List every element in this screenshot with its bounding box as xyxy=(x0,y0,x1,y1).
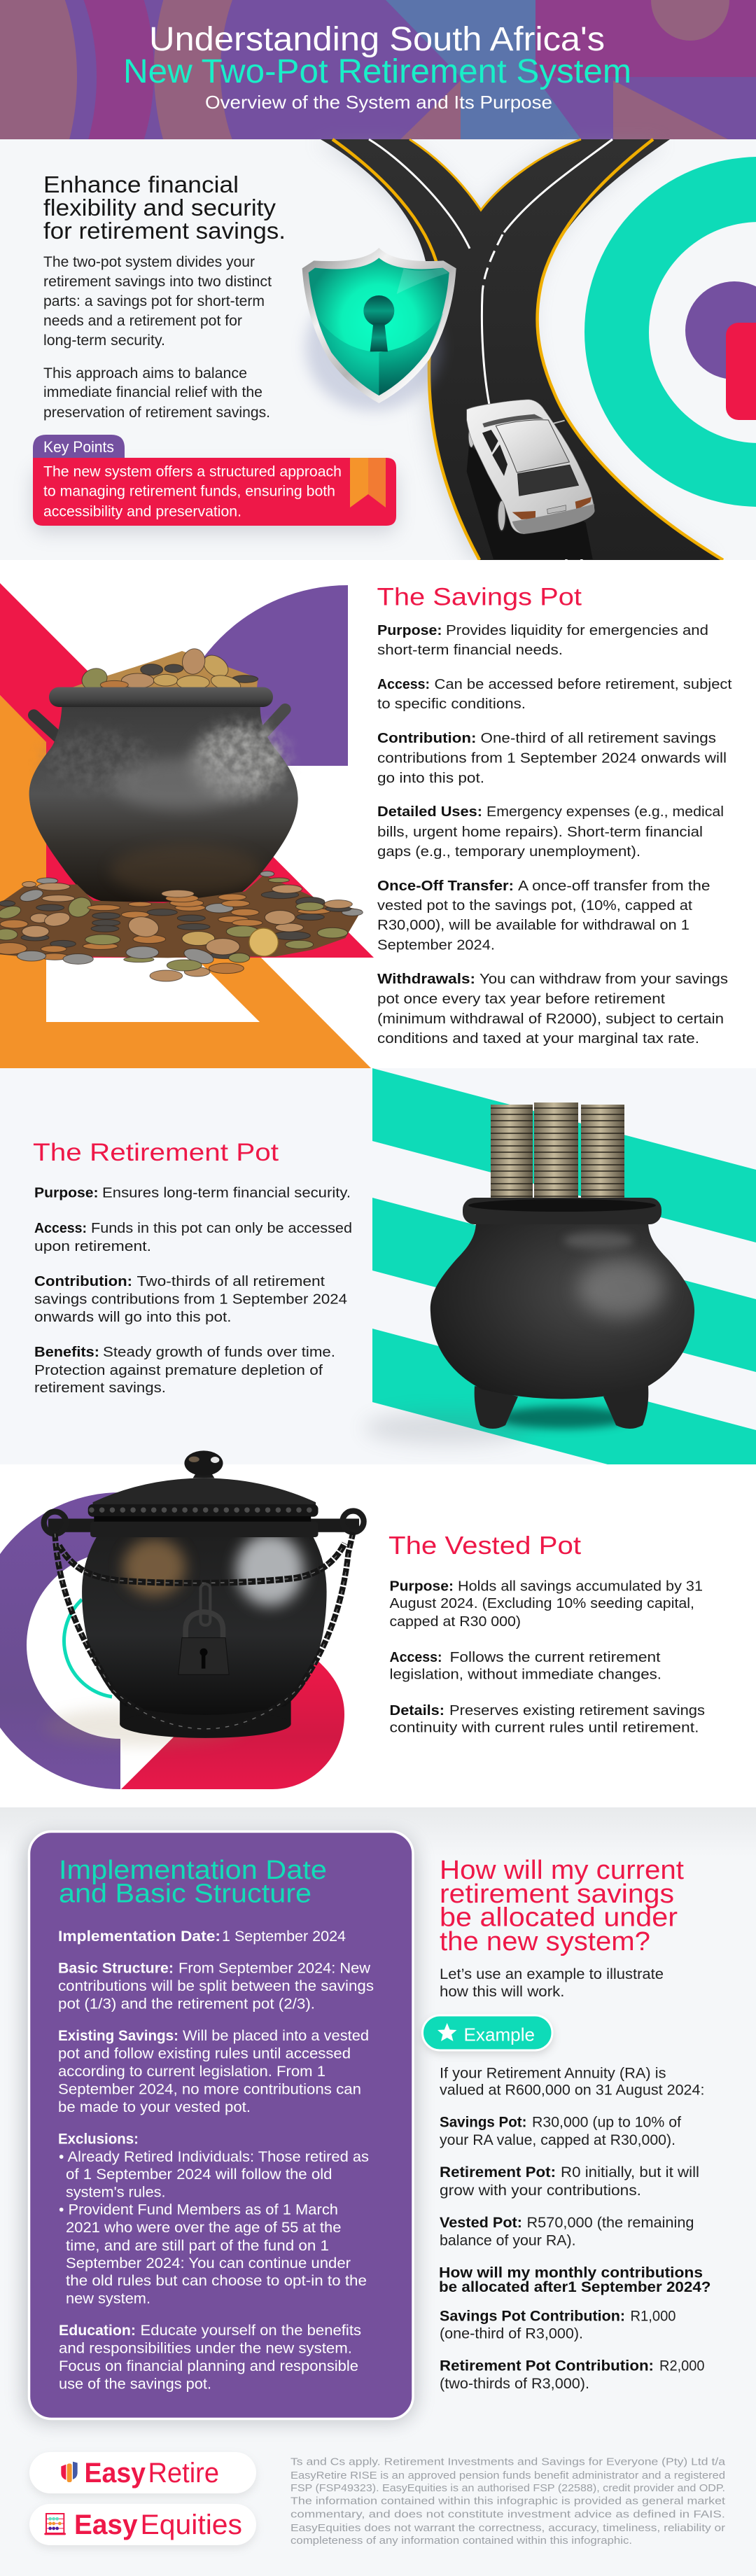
text: savings pot details: gaps (e.g., temporary unemployment). xyxy=(377,844,640,860)
text: implementation details: new system. xyxy=(66,2290,150,2307)
text: savings pot details: Can be accessed before retirement, subject xyxy=(434,677,732,692)
knob xyxy=(184,1450,223,1478)
coin stacks xyxy=(491,1102,624,1206)
text: two-pot description: This approach aims to balance xyxy=(43,365,247,382)
text: vested pot details: legislation, without immediate changes. xyxy=(389,1667,662,1683)
text: implementation details: Existing Savings: xyxy=(58,2028,178,2044)
heading: enhance financial flexibility: for retirement savings. xyxy=(43,218,286,244)
text: implementation details: be made to your vested pot. xyxy=(58,2099,251,2115)
text: two-pot description: parts: a savings pot for short-term xyxy=(43,293,265,309)
heading: the vested pot: The Vested Pot xyxy=(388,1531,581,1560)
panel: the vested pot xyxy=(0,1450,756,1807)
text: implementation details: Exclusions: xyxy=(58,2131,139,2148)
text: retirement pot details: Protection against premature depletion of xyxy=(34,1363,323,1378)
text: legal disclaimer: commentary, and does not constitute investment advice as defined in FAIS. xyxy=(290,2509,725,2520)
text: savings pot details: bills, urgent home repairs). Short-term financial xyxy=(377,825,703,840)
text: vested pot details: Preserves existing retirement savings xyxy=(449,1703,705,1718)
illustration: pot of coins xyxy=(0,646,363,981)
callout: key points xyxy=(33,435,396,532)
text: implementation details: September 2024, no more contributions can xyxy=(58,2082,361,2097)
heading: the savings pot: The Savings Pot xyxy=(377,584,582,610)
text: savings pot details: conditions and taxed at your marginal tax rate. xyxy=(377,1031,699,1046)
text: savings pot details: Detailed Uses: xyxy=(377,804,482,820)
heading: enhance financial flexibility: flexibility and security xyxy=(43,195,276,220)
text: savings pot details: (minimum withdrawal of R2000), subject to certain xyxy=(377,1011,724,1027)
text: savings pot details: go into this pot. xyxy=(377,771,484,786)
heading: how will my current retirement savings be allocated: retirement savings xyxy=(440,1879,674,1909)
logo: EasyEquities: Equities xyxy=(140,2510,242,2540)
text: example calculation: Savings Pot: xyxy=(440,2114,526,2131)
icon: shield with keyhole xyxy=(302,248,456,411)
text: savings pot details: Emergency expenses (e.g., medical xyxy=(486,804,724,820)
text: vested pot details: capped at R30 000) xyxy=(389,1614,521,1630)
text: savings pot details: contributions from 1 September 2024 onwards will xyxy=(377,750,727,766)
text: implementation details: • xyxy=(59,2202,64,2218)
text: implementation details: Provident Fund Members as of 1 March xyxy=(69,2202,338,2218)
heading: how will my current retirement savings be allocated: be allocated under xyxy=(440,1903,678,1932)
panel: implementation and example xyxy=(0,1807,756,2549)
text: two-pot description: The two-pot system divides your xyxy=(43,254,255,270)
text: implementation details: 1 September 2024 xyxy=(222,1928,346,1945)
text: retirement pot details: Funds in this pot can only be accessed xyxy=(91,1221,352,1236)
text: savings pot details: Provides liquidity for emergencies and xyxy=(446,623,708,638)
icon: star xyxy=(438,2023,456,2041)
badge: example: Example xyxy=(463,2024,535,2045)
text: example calculation: R2,000 xyxy=(659,2358,704,2374)
text: retirement pot details: Access: xyxy=(34,1221,87,1236)
panel: header banner xyxy=(0,0,756,139)
illustration: car xyxy=(467,400,594,559)
text: example calculation: R570,000 (the remaining xyxy=(526,2215,694,2231)
title line 2: New Two-Pot Retirement System xyxy=(123,53,631,90)
text: example intro xyxy=(440,1966,664,2000)
text: example calculation: R1,000 xyxy=(630,2309,676,2324)
text: retirement pot details: Ensures long-term financial security. xyxy=(102,1186,351,1201)
keyhole xyxy=(363,295,394,351)
text: two-pot description: preservation of retirement savings. xyxy=(43,405,270,421)
callout: key points: Key Points xyxy=(43,438,114,456)
panel: the savings pot xyxy=(0,560,756,1069)
text: example intro: Let’s use an example to illustrate xyxy=(440,1966,664,1982)
heading: enhance financial flexibility xyxy=(43,172,286,244)
background teal stripes xyxy=(372,1068,756,1464)
text: legal disclaimer: EasyRetire RISE is an approved pension funds benefit administrator and a registered xyxy=(290,2470,725,2482)
text: example calculation: Savings Pot Contribution: xyxy=(440,2309,625,2324)
text: example calculation: be allocated after1 September 2024? xyxy=(439,2279,711,2295)
heading: implementation date xyxy=(59,1856,327,1908)
text: implementation details: Basic Structure: xyxy=(58,1960,174,1977)
text: implementation details: according to current legislation. From 1 xyxy=(58,2064,326,2080)
text: legal disclaimer xyxy=(290,2456,726,2547)
logo: EasyEquities xyxy=(29,2504,256,2549)
text: two-pot description: immediate financial relief with the xyxy=(43,384,262,400)
logo: EasyRetire: Retire xyxy=(148,2458,219,2488)
text: implementation details: Education: xyxy=(59,2323,136,2339)
text: savings pot details: Purpose: xyxy=(377,623,442,638)
heading: the retirement pot: The Retirement Pot xyxy=(33,1139,279,1166)
text: two-pot description: needs and a retirement pot for xyxy=(43,313,242,329)
text: implementation details xyxy=(58,1928,374,2393)
text: implementation details: Already Retired Individuals: Those retired as xyxy=(67,2149,369,2165)
text: implementation details: Focus on financial planning and responsible xyxy=(59,2358,358,2374)
text: example calculation: (one-third of R3,000). xyxy=(440,2325,583,2342)
text: savings pot details: Access: xyxy=(377,677,430,692)
text: savings pot details: Withdrawals: xyxy=(377,972,475,987)
text: retirement pot details xyxy=(34,1186,352,1396)
text: implementation details: use of the savings pot. xyxy=(59,2376,211,2393)
text: legal disclaimer: EasyEquities does not warrant the correctness, accuracy, timeliness, reliability or xyxy=(290,2522,725,2534)
text: implementation details: • xyxy=(59,2149,64,2165)
text: retirement pot details: Contribution: xyxy=(34,1274,132,1289)
text: retirement pot details: Steady growth of funds over time. xyxy=(103,1345,335,1360)
text: example calculation: balance of your RA). xyxy=(440,2233,575,2248)
heading: enhance financial flexibility: Enhance financial xyxy=(43,172,239,197)
subtitle: Overview of the System and Its Purpose xyxy=(205,92,552,113)
title line 1: Understanding South Africa's xyxy=(149,21,605,58)
text: implementation details: From September 2024: New xyxy=(178,1960,371,1977)
text: two-pot description: long-term security. xyxy=(43,332,165,349)
text: retirement pot details: onwards will go into this pot. xyxy=(34,1310,231,1325)
heading: implementation date: and Basic Structure xyxy=(59,1879,312,1908)
card: implementation date and basic structure xyxy=(24,1831,416,2422)
text: retirement pot details: savings contributions from 1 September 2024 xyxy=(34,1292,347,1308)
text: implementation details: Will be placed into a vested xyxy=(183,2028,369,2044)
text: savings pot details: A once-off transfer from the xyxy=(518,878,710,894)
text: savings pot details: short-term financial needs. xyxy=(377,643,563,658)
callout: key points: accessibility and preservation. xyxy=(43,504,241,519)
text: savings pot details: vested pot to the savings pot, (10%, capped at xyxy=(377,898,692,913)
badge: example xyxy=(423,2015,553,2054)
text: implementation details: of 1 September 2024 will follow the old xyxy=(66,2166,332,2183)
text: savings pot details: Once-Off Transfer: xyxy=(377,878,514,894)
text: implementation details: and responsibilities under the new system. xyxy=(59,2341,352,2356)
text: savings pot details: September 2024. xyxy=(377,938,495,953)
text: example calculation: If your Retirement Annuity (RA) is xyxy=(440,2065,666,2082)
text: vested pot details: Follows the current retirement xyxy=(449,1650,661,1665)
text: vested pot details: Details: xyxy=(389,1703,444,1718)
background ring shapes xyxy=(0,1492,344,1789)
text: retirement pot details: Two-thirds of all retirement xyxy=(137,1274,325,1289)
illustration: teal target rings xyxy=(584,157,756,507)
logo: EasyRetire: Easy xyxy=(84,2458,146,2488)
text: vested pot details: continuity with current rules until retirement. xyxy=(389,1721,699,1736)
heading: how will my current retirement savings be allocated: How will my current xyxy=(440,1856,684,1885)
icon: padlock xyxy=(178,1584,229,1674)
text: savings pot details: to specific conditions. xyxy=(377,696,526,712)
text: implementation details: time, and are still part of the fund on 1 xyxy=(66,2238,329,2254)
text: vested pot details xyxy=(389,1579,705,1736)
text: legal disclaimer: The information contained within this infographic is provided as general market xyxy=(290,2495,726,2507)
background geometric shapes xyxy=(0,583,374,1069)
text: savings pot details: R30,000), will be available for withdrawal on 1 xyxy=(377,918,690,933)
text: implementation details: 2021 who were over the age of 55 at the xyxy=(66,2220,342,2236)
text: vested pot details: Access: xyxy=(389,1650,442,1665)
coins around the pot xyxy=(0,871,363,981)
text: savings pot details: You can withdraw from your savings xyxy=(479,972,728,987)
text: example calculation: R30,000 (up to 10% of xyxy=(532,2114,681,2131)
text: example calculation: valued at R600,000 on 31 August 2024: xyxy=(440,2082,704,2099)
text: implementation details: system's rules. xyxy=(66,2184,165,2201)
text: implementation details: contributions will be split between the savings xyxy=(58,1978,374,1994)
text: retirement pot details: Purpose: xyxy=(34,1186,98,1201)
heading: implementation date: Implementation Date xyxy=(59,1856,327,1885)
text: implementation details: Educate yourself on the benefits xyxy=(140,2323,361,2339)
text: example calculation: your RA value, capped at R30,000). xyxy=(440,2132,676,2148)
text: savings pot details: Contribution: xyxy=(377,731,476,746)
icon: EasyRetire bars xyxy=(61,2462,78,2482)
callout: key points: The new system offers a structured approach xyxy=(43,463,342,480)
text: example calculation: (two-thirds of R3,000). xyxy=(440,2376,589,2392)
text: savings pot details xyxy=(377,623,732,1046)
coins on top of the pot xyxy=(79,646,258,694)
text: vested pot details: Purpose: xyxy=(389,1579,454,1595)
text: example calculation: grow with your contributions. xyxy=(440,2183,641,2199)
panel: introduction xyxy=(33,139,756,563)
text: vested pot details: August 2024. (Excluding 10% seeding capital, xyxy=(389,1596,694,1611)
text: savings pot details: pot once every tax year before retirement xyxy=(377,991,665,1007)
logo: EasyRetire xyxy=(29,2452,256,2497)
text: implementation details: the old rules but can choose to opt-in to the xyxy=(66,2273,367,2289)
text: legal disclaimer: Ts and Cs apply. Retirement Investments and Savings for Everyone (Pty) Ltd t/a xyxy=(290,2456,726,2468)
text: implementation details: pot (1/3) and the retirement pot (2/3). xyxy=(58,1996,315,2012)
text: example calculation xyxy=(439,2065,711,2392)
panel: the retirement pot xyxy=(0,1068,756,1464)
text: example calculation: Vested Pot: xyxy=(440,2215,522,2231)
text: vested pot details: Holds all savings accumulated by 31 xyxy=(458,1579,703,1595)
text: example calculation: How will my monthly contributions xyxy=(439,2265,703,2281)
text: example calculation: R0 initially, but it will xyxy=(561,2164,699,2180)
text: two-pot description xyxy=(43,254,272,421)
chains xyxy=(55,1532,353,1729)
illustration: locked pot with chains xyxy=(43,1450,364,1746)
text: retirement pot details: retirement savings. xyxy=(34,1380,166,1396)
text: retirement pot details: upon retirement. xyxy=(34,1239,151,1254)
text: implementation details: Implementation Date: xyxy=(58,1928,220,1945)
text: two-pot description: retirement savings into two distinct xyxy=(43,274,272,290)
text: example intro: how this will work. xyxy=(440,1984,564,2000)
text: retirement pot details: Benefits: xyxy=(34,1345,99,1360)
text: implementation details: pot and follow existing rules until accessed xyxy=(58,2045,351,2062)
text: savings pot details: One-third of all retirement savings xyxy=(480,731,716,746)
text: example calculation: Retirement Pot Contribution: xyxy=(440,2358,654,2374)
heading: how will my current retirement savings be allocated xyxy=(440,1856,684,1956)
text: legal disclaimer: completeness of any information contained within this infographic. xyxy=(290,2535,632,2547)
logo: EasyEquities: Easy xyxy=(74,2510,138,2540)
text: implementation details: September 2024: You can continue under xyxy=(66,2255,351,2272)
icon: abacus xyxy=(44,2514,66,2535)
text: legal disclaimer: FSP (FSP49323). EasyEquities is an authorised FSP (22588), credit provider and ODP. xyxy=(290,2482,725,2494)
heading: how will my current retirement savings be allocated: the new system? xyxy=(440,1927,650,1956)
callout: key points: to managing retirement funds, ensuring both xyxy=(43,483,335,500)
text: example calculation: Retirement Pot: xyxy=(440,2164,556,2180)
illustration: forking road xyxy=(315,139,723,563)
illustration: pot with coin stacks xyxy=(364,1102,694,1445)
